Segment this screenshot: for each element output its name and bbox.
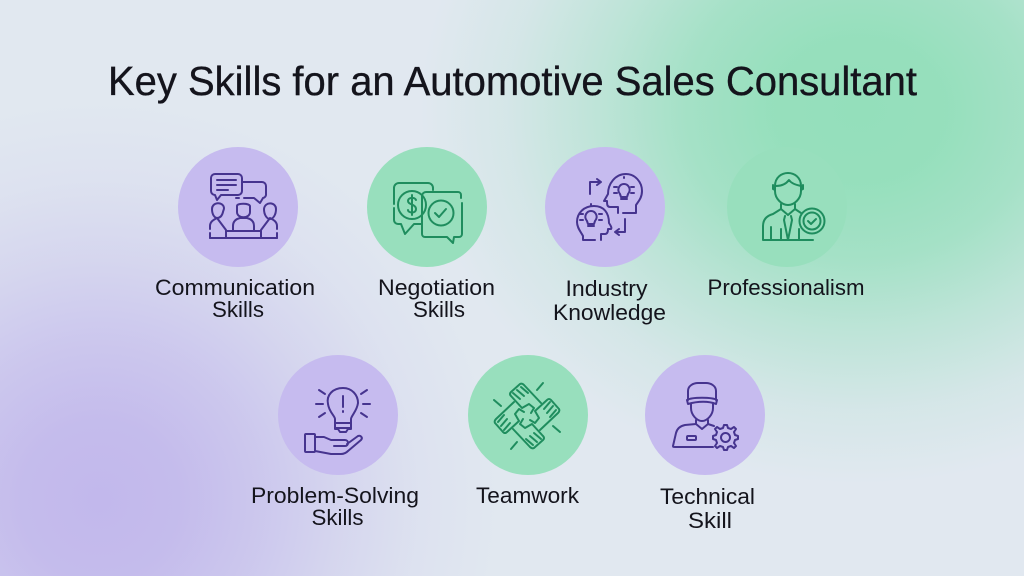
circle: communication	[178, 147, 298, 267]
hand: bottom	[511, 419, 544, 449]
skill: Problem-Solving Skills	[251, 355, 419, 530]
icon: technician with gear	[673, 383, 738, 450]
label: Professionalism	[708, 275, 864, 300]
title: Key Skills for an Automotive Sales Consultant	[108, 58, 918, 104]
icon: price and approval bubbles	[394, 183, 462, 243]
skill: Technical Skill	[645, 355, 765, 533]
label: Industry	[566, 276, 648, 301]
skill: Industry Knowledge	[545, 147, 666, 325]
hand: left	[494, 400, 524, 433]
label: Technical	[660, 484, 755, 509]
skill: Negotiation Skills	[367, 147, 495, 322]
circle: professionalism	[727, 147, 847, 267]
circle: problem solving	[278, 355, 398, 475]
hand: top	[510, 383, 543, 413]
label: Teamwork	[476, 483, 580, 508]
skill: Communication Skills: Skills	[212, 297, 264, 322]
icon: team conversation	[210, 174, 277, 238]
icon: certified professional	[763, 173, 824, 240]
skill: Problem-Solving Skills: Skills	[312, 505, 364, 530]
icon: four linked hands	[494, 383, 560, 449]
skill: Industry Knowledge: Knowledge	[553, 300, 666, 325]
skill: Technical Skill: Skill	[688, 508, 732, 533]
skill: Communication Skills	[155, 147, 315, 322]
circle: negotiation	[367, 147, 487, 267]
icon: heads sharing ideas	[577, 174, 642, 240]
label: Problem-Solving	[251, 483, 419, 508]
circle: industry	[545, 147, 665, 267]
circle: technical	[645, 355, 765, 475]
circle: teamwork	[468, 355, 588, 475]
label: Negotiation	[378, 275, 495, 300]
label: Communication	[155, 275, 315, 300]
skill: Negotiation Skills: Skills	[413, 297, 465, 322]
skill: Teamwork	[468, 355, 588, 508]
skill: Professionalism	[708, 147, 864, 300]
icon: hand holding lightbulb	[305, 388, 370, 454]
hand: right	[530, 399, 560, 432]
